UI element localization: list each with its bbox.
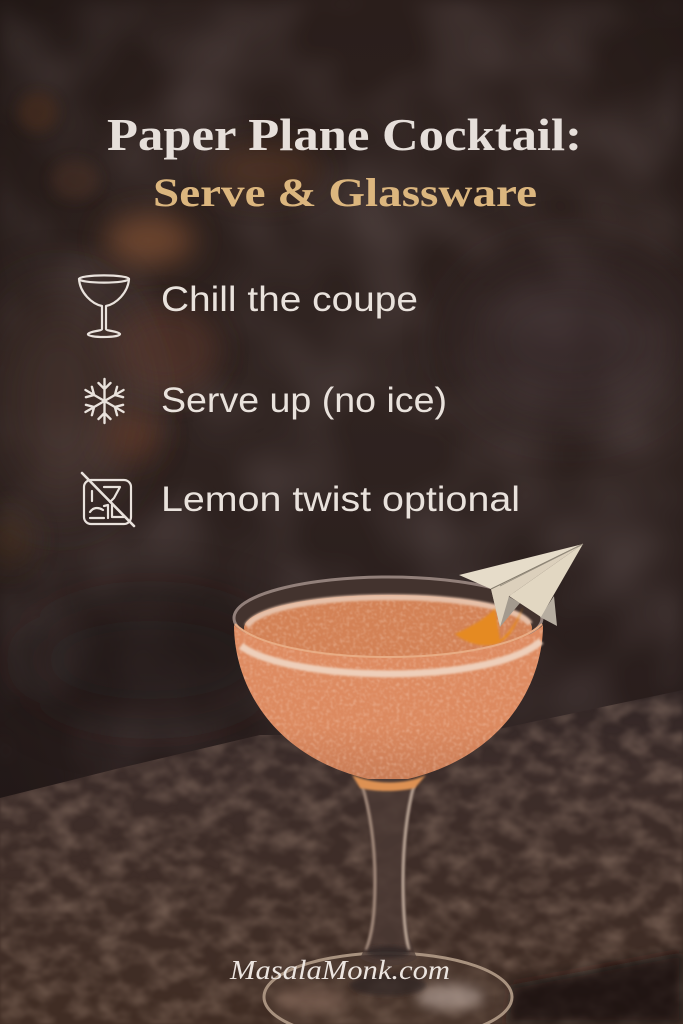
list: serving tips — [79, 275, 520, 526]
title line 2: Serve & Glassware — [153, 170, 537, 215]
paper plane — [459, 544, 583, 627]
liquid surface — [244, 595, 532, 661]
glass shadow on table — [505, 952, 683, 1024]
foam ring back — [247, 597, 530, 626]
glass foot — [264, 953, 512, 1024]
table surface — [0, 680, 683, 1024]
text: serve up: Serve up (no ice) — [161, 381, 447, 420]
empty upper glass — [234, 577, 542, 659]
glass rim front — [235, 624, 542, 657]
glass stem — [358, 779, 420, 966]
orange peel — [455, 607, 523, 645]
website credit: MasalaMonk.com — [229, 955, 450, 985]
text: lemon twist optional: Lemon twist optional — [161, 480, 520, 519]
foam ring front — [241, 641, 541, 674]
icon: snowflake — [82, 379, 127, 423]
text: chill the coupe: Chill the coupe — [161, 280, 418, 319]
title — [107, 110, 582, 215]
cocktail glass with drink — [230, 577, 550, 1024]
bowl — [234, 625, 543, 779]
glass stem top — [352, 775, 426, 791]
icon: coupe glass — [79, 275, 129, 337]
title line 1: Paper Plane Cocktail: — [107, 110, 582, 160]
icon: no ice — [82, 473, 134, 526]
